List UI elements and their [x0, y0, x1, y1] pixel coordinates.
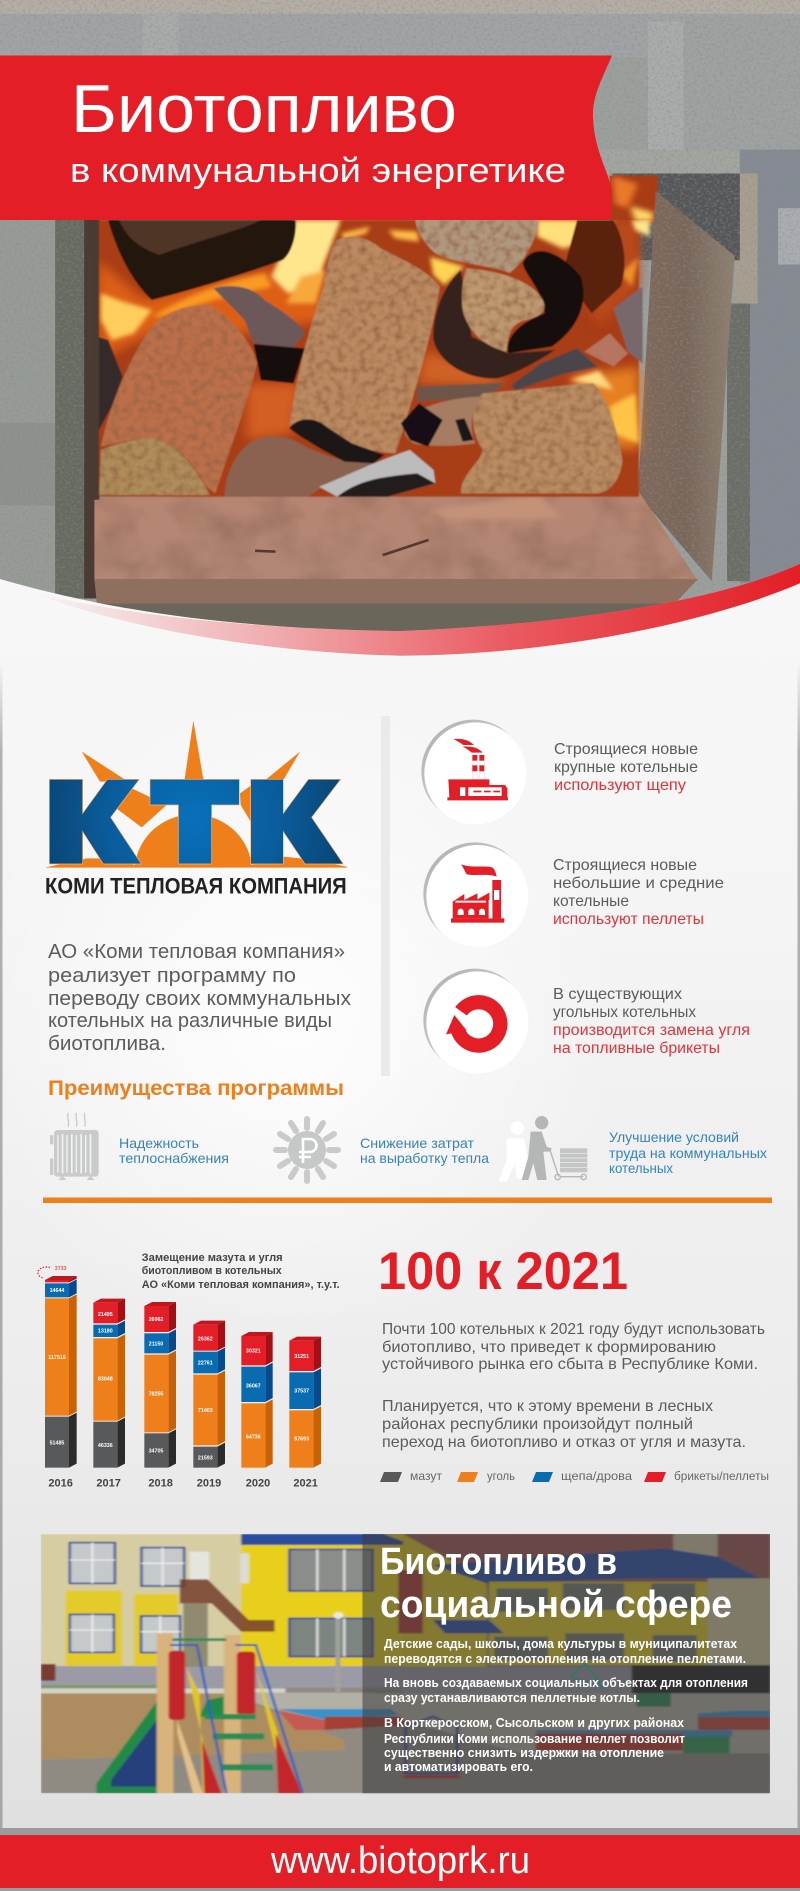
dark briquette	[108, 220, 296, 300]
callout 3733	[38, 1266, 67, 1278]
bar 2020: 36067	[246, 1383, 261, 1389]
item: small boilers: котельные	[553, 893, 629, 910]
chart legend: щепа/дрова	[561, 1469, 632, 1483]
chart title	[142, 1252, 340, 1291]
company description: биотоплива.	[48, 1033, 166, 1055]
chart legend	[380, 1469, 769, 1483]
panel body: переводятся с электроотопления на отопление пеллетами.	[384, 1651, 746, 1666]
company description: реализует программу по	[48, 965, 296, 987]
panel body: Детские сады, школы, дома культуры в муниципалитетах	[384, 1636, 738, 1651]
chart title: Замещение мазута и угля	[142, 1252, 283, 1264]
bar 2020	[241, 1332, 273, 1490]
title: Биотопливо	[71, 71, 457, 147]
photo: burning briquettes	[90, 220, 654, 500]
bar 2021	[289, 1337, 321, 1490]
panel body	[384, 1636, 748, 1774]
bar 2020: 30321	[246, 1348, 261, 1354]
text: paragraph one: устойчивого рынка его сбыта в Республике Коми.	[382, 1356, 758, 1373]
icon: workers with cart	[499, 1116, 588, 1182]
company description	[48, 941, 351, 1055]
bar 2017: 21495	[98, 1312, 113, 1318]
bar 2018: 21150	[149, 1341, 163, 1347]
fire chamber top corner	[610, 176, 658, 223]
bar 2016	[45, 1276, 77, 1490]
panel heading: социальной сфере	[380, 1584, 732, 1626]
item: small boilers: используют пеллеты	[553, 911, 704, 928]
item: small boilers: Строящиеся новые	[553, 857, 697, 874]
bar 2019	[193, 1321, 225, 1490]
item: small boilers: небольшие и средние	[553, 875, 724, 892]
red decorative swoosh	[57, 564, 800, 656]
company description: переводу своих коммунальных	[48, 988, 351, 1010]
left briquette	[101, 305, 257, 493]
subtitle: в коммунальной энергетике	[70, 152, 566, 190]
icon: small factory	[423, 842, 528, 947]
chart title: биотопливом в котельных	[142, 1265, 283, 1277]
text: paragraph two: районах республики произойдут полный	[382, 1416, 693, 1433]
chart legend: уголь	[487, 1469, 515, 1483]
item: coal boilers: В существующих	[553, 986, 682, 1003]
bar 2018: 26962	[149, 1317, 163, 1323]
photo: furnace metal door frame	[0, 0, 800, 631]
item: large boilers: крупные котельные	[554, 759, 698, 776]
item: large boilers: используют щепу	[554, 777, 686, 794]
bar 2018: 2018	[148, 1478, 173, 1490]
inner right wall	[638, 191, 735, 581]
left briquette end	[99, 438, 210, 495]
item: large boilers: Строящиеся новые	[554, 741, 698, 758]
top briquette	[415, 220, 539, 273]
bar 2016: 117515	[48, 1355, 66, 1361]
bar 2020: 64736	[246, 1434, 261, 1440]
logo sun and rays	[46, 721, 347, 868]
title banner	[0, 56, 612, 220]
panel heading: Биотопливо в	[380, 1541, 617, 1583]
bar 2016: 51485	[50, 1440, 64, 1446]
benefit: working conditions: труда на коммунальных	[609, 1145, 767, 1161]
item: large boilers	[554, 741, 698, 794]
chart legend: мазут	[410, 1469, 443, 1483]
bar 2017: 13180	[98, 1329, 113, 1335]
item: coal boilers: на топливные брикеты	[553, 1040, 720, 1057]
company description: АО «Коми тепловая компания»	[48, 941, 345, 963]
bar 2021: 31251	[294, 1354, 309, 1360]
benefit: cost reduction: Снижение затрат	[360, 1135, 475, 1151]
bar 2020: 2020	[246, 1478, 270, 1490]
lower right briquette	[461, 383, 623, 493]
icon: large boiler plant	[421, 720, 526, 824]
bar 2016: 14644	[50, 1288, 64, 1294]
benefit: reliability: теплоснабжения	[119, 1150, 229, 1166]
item: coal boilers: угольных котельных	[553, 1004, 696, 1021]
text: paragraph one: Почти 100 котельных к 2021 году будут использовать	[382, 1321, 765, 1338]
headline: 100 к 2021: 100 к 2021	[378, 1242, 628, 1301]
benefit: cost reduction: на выработку тепла	[360, 1150, 489, 1166]
photo: kindergarten with playground	[40, 1534, 770, 1794]
bar 2017: 46336	[98, 1443, 113, 1449]
panel body: сразу устанавливаются пеллетные котлы.	[384, 1690, 640, 1705]
logo: KTK	[45, 720, 347, 899]
text: paragraph one	[382, 1321, 765, 1373]
social sphere panel text	[380, 1541, 748, 1774]
icon: radiator	[50, 1112, 99, 1180]
charred right	[508, 251, 583, 353]
benefit: working conditions: котельных	[609, 1160, 673, 1176]
bar 2018: 78255	[149, 1391, 163, 1397]
bar 2017: 2017	[96, 1478, 121, 1490]
dark overlay	[362, 1534, 770, 1793]
end of right briquette	[462, 268, 544, 352]
char under middle briquette	[289, 419, 384, 463]
stacked bar chart	[37, 1266, 321, 1490]
bar 2017: 83048	[98, 1376, 113, 1382]
text: paragraph two: Планируется, что к этому времени в лесных	[382, 1398, 713, 1415]
vertical divider	[381, 716, 390, 1076]
ash and embers	[214, 286, 304, 348]
chart title: АО «Коми тепловая компания», т.у.т.	[142, 1279, 340, 1291]
benefit: cost reduction	[360, 1135, 489, 1166]
footer band	[0, 1828, 800, 1891]
middle briquette	[289, 237, 440, 453]
text: paragraph two: переход на биотопливо и отказ от угля и мазута.	[382, 1434, 746, 1451]
small burnt piece	[404, 397, 483, 446]
bar 2018	[144, 1302, 176, 1490]
bar 2019: 21593	[198, 1455, 213, 1461]
panel body: На вновь создаваемых социальных объектах для отопления	[384, 1675, 748, 1690]
bar 2019: 71403	[198, 1408, 213, 1414]
bar 2016: 2016	[48, 1478, 73, 1490]
website: www.biotoprk.ru	[270, 1840, 530, 1882]
icons column	[421, 720, 528, 1073]
item: coal boilers	[553, 986, 750, 1057]
bar 2019: 2019	[197, 1478, 221, 1490]
company description: котельных на различные виды	[48, 1010, 332, 1032]
ash	[319, 450, 435, 497]
ground under the briquettes	[225, 436, 381, 497]
bar 2017	[93, 1299, 125, 1490]
panel body: Республики Коми использование пеллет позволит	[384, 1731, 685, 1746]
bar 2019: 26362	[198, 1336, 213, 1342]
chart legend: брикеты/пеллеты	[674, 1469, 769, 1483]
icon: replacement cycle	[423, 969, 528, 1073]
panel body: и автоматизировать его.	[384, 1759, 533, 1774]
bar 2021: 2021	[293, 1478, 318, 1490]
benefit: working conditions	[609, 1129, 767, 1176]
heading: advantages: Преимущества программы	[48, 1077, 344, 1100]
benefit: reliability: Надежность	[119, 1135, 199, 1151]
glowing fire	[97, 220, 639, 450]
benefit: reliability	[119, 1135, 229, 1166]
orange divider	[43, 1198, 772, 1203]
item: small boilers	[553, 857, 724, 928]
icon: sun with ruble	[276, 1119, 338, 1181]
item: coal boilers: производится замена угля	[553, 1022, 750, 1039]
panel body: В Корткеросском, Сысольском и других районах	[384, 1715, 685, 1730]
panel body: существенно снизить издержки на отопление	[384, 1745, 664, 1760]
callout 3733: 3733	[55, 1266, 67, 1272]
bar 2019: 22761	[198, 1361, 213, 1367]
text: paragraph two	[382, 1398, 746, 1451]
benefit: working conditions: Улучшение условий	[609, 1129, 739, 1145]
logo letters	[49, 779, 343, 864]
hearth floor	[94, 490, 698, 581]
bar 2021: 37537	[294, 1389, 309, 1395]
bar 2018: 34705	[149, 1449, 163, 1455]
panel heading	[380, 1541, 732, 1626]
bar 2021: 57693	[294, 1437, 309, 1443]
text: paragraph one: биотопливо, что приведет к формированию	[382, 1339, 716, 1356]
